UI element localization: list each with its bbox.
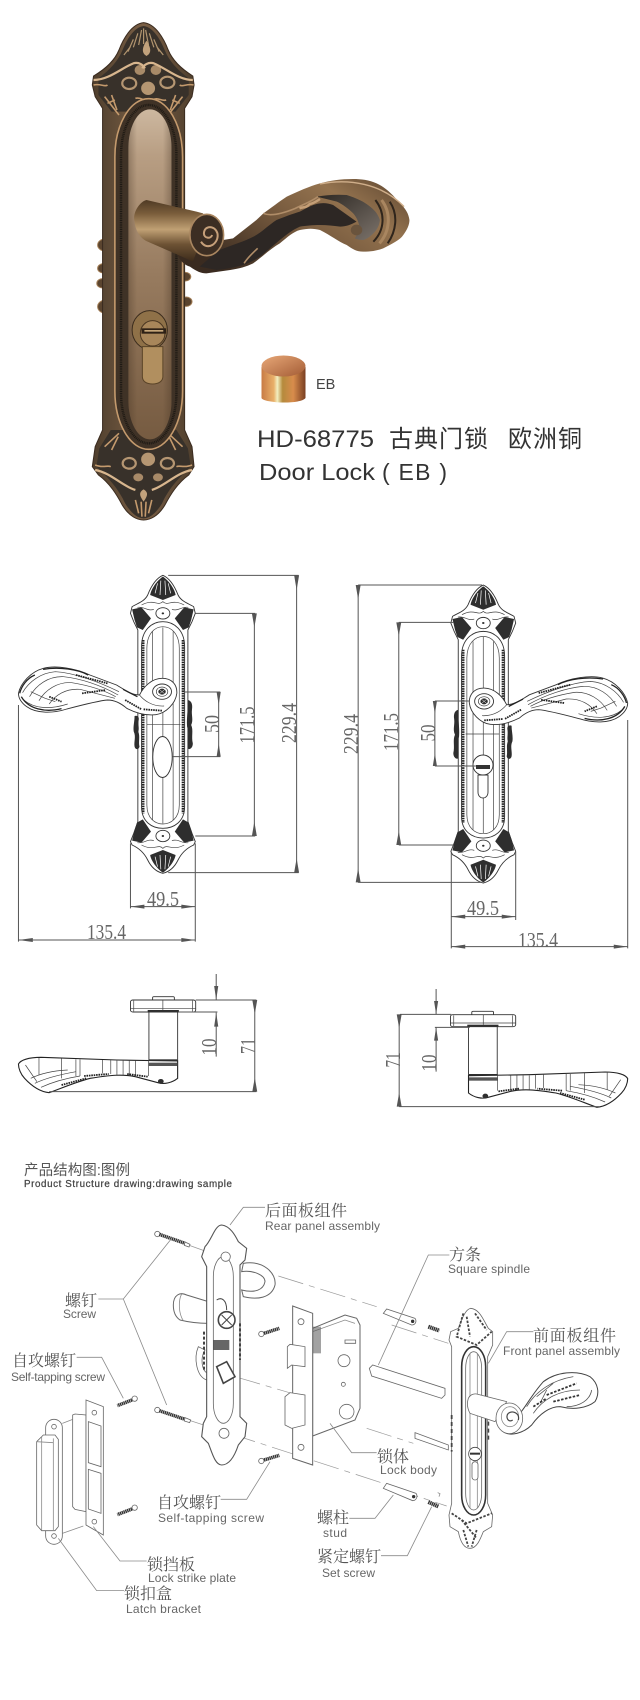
dimension 135.4: 135.4 [518,928,558,952]
assembly dashed axes [188,1245,448,1506]
structure section heading: 产品结构图:图例 [24,1162,130,1179]
label: rear panel assembly: Rear panel assembly [265,1219,380,1233]
key cylinder [132,311,167,384]
dimension 229.4: 229.4 [277,703,301,743]
label: front panel assembly: Front panel assembly [503,1344,620,1358]
product title: 欧洲铜 [508,426,582,453]
label: lock strike plate: 锁挡板 [147,1555,195,1574]
set screws [428,1327,439,1507]
label: lock body: 锁体 [377,1447,409,1466]
front panel assembly [449,1308,493,1548]
dimension 229.4: 229.4 [339,714,363,754]
label: screw: 螺钉 [65,1292,97,1310]
label: self-tapping screw center: Self-tapping screw [158,1511,264,1525]
square spindle [369,1365,445,1398]
label: lock body: Lock body [380,1463,437,1477]
structure section heading: Product Structure drawing:drawing sample [24,1179,233,1190]
product title: Door Lock [259,459,376,485]
structure section heading [24,1162,233,1190]
lever [176,179,409,273]
front view dimensioned drawing: left [18,575,301,944]
right lock line art [451,585,628,883]
left keyhole [153,736,172,778]
top ornament [94,26,194,115]
product title [257,426,582,485]
label: self-tapping screw center: 自攻螺钉 [157,1494,221,1512]
finish swatch [262,356,306,403]
label: self-tapping screw left: Self-tapping screw [11,1370,105,1384]
studs [383,1309,417,1501]
label: latch bracket: 锁扣盒 [124,1584,172,1603]
long screws [155,1231,191,1423]
dimension 50: 50 [416,724,440,742]
product title: HD-68775 [257,426,374,453]
lock body [285,1306,360,1465]
strike plate [62,1400,103,1535]
left dimension lines [18,575,299,942]
right dimension lines [356,585,628,949]
left side view line art [18,997,196,1093]
label: rear panel assembly [265,1202,380,1233]
right side dimension lines [397,989,599,1107]
label: lock strike plate: Lock strike plate [148,1571,236,1585]
product title: ( EB ) [382,459,447,485]
backplate [92,23,194,520]
label: rear panel assembly: 后面板组件 [265,1202,347,1220]
label: self-tapping screw center [157,1494,264,1525]
label: front panel assembly [503,1327,620,1358]
label: set screw: Set screw [322,1566,375,1580]
label: lock body [377,1447,437,1477]
label: screw [63,1292,97,1321]
label: stud [317,1509,349,1540]
self-tapping screws [117,1328,279,1515]
dimension 49.5: 49.5 [147,887,179,911]
label: self-tapping screw left [11,1352,105,1384]
label: front panel assembly: 前面板组件 [533,1327,616,1345]
dimension 171.5: 171.5 [235,706,259,744]
product photo: door lock [92,23,409,520]
right side view line art [450,1011,628,1107]
side bumps [97,239,192,313]
swatch label: EB [316,377,335,393]
left lock line art [18,575,195,873]
small pin mark [438,1493,440,1497]
label: stud: stud [323,1526,347,1540]
label: square spindle: Square spindle [448,1262,530,1276]
label: latch bracket: Latch bracket [126,1602,202,1616]
label: lock strike plate [147,1555,236,1585]
label: self-tapping screw left: 自攻螺钉 [12,1352,76,1370]
dimension 71: 71 [381,1052,405,1068]
dimension 49.5: 49.5 [467,896,499,920]
dimension 10: 10 [417,1054,441,1072]
label: screw: Screw [63,1307,96,1321]
right keyhole cylinder [473,755,493,798]
oval recess [115,99,183,449]
dimension 10: 10 [197,1038,221,1056]
dimension 135.4: 135.4 [87,920,126,944]
right-side small parts [369,1308,598,1548]
exploded assembly diagram [37,1207,598,1591]
handle neck [134,200,224,262]
label: set screw [317,1548,381,1580]
label: latch bracket [124,1584,202,1616]
rear panel assembly [173,1225,275,1465]
label: set screw: 紧定螺钉 [317,1548,381,1566]
label: stud: 螺柱 [317,1509,349,1527]
dimension 50: 50 [200,715,224,733]
label: square spindle [448,1246,530,1276]
latch bracket [37,1419,62,1544]
mounting bar [415,1433,448,1450]
left side dimension lines [49,974,257,1092]
dimension 71: 71 [236,1038,260,1054]
front view dimensioned drawing: right [339,585,628,952]
bottom ornament [95,430,192,518]
label: square spindle: 方条 [449,1246,481,1264]
dimension 171.5: 171.5 [379,713,403,751]
side view drawing: right [381,989,628,1107]
front lever handle [467,1373,598,1434]
product title: 古典门锁 [389,426,488,453]
side view drawing: left [18,974,260,1093]
leader lines [58,1207,533,1591]
